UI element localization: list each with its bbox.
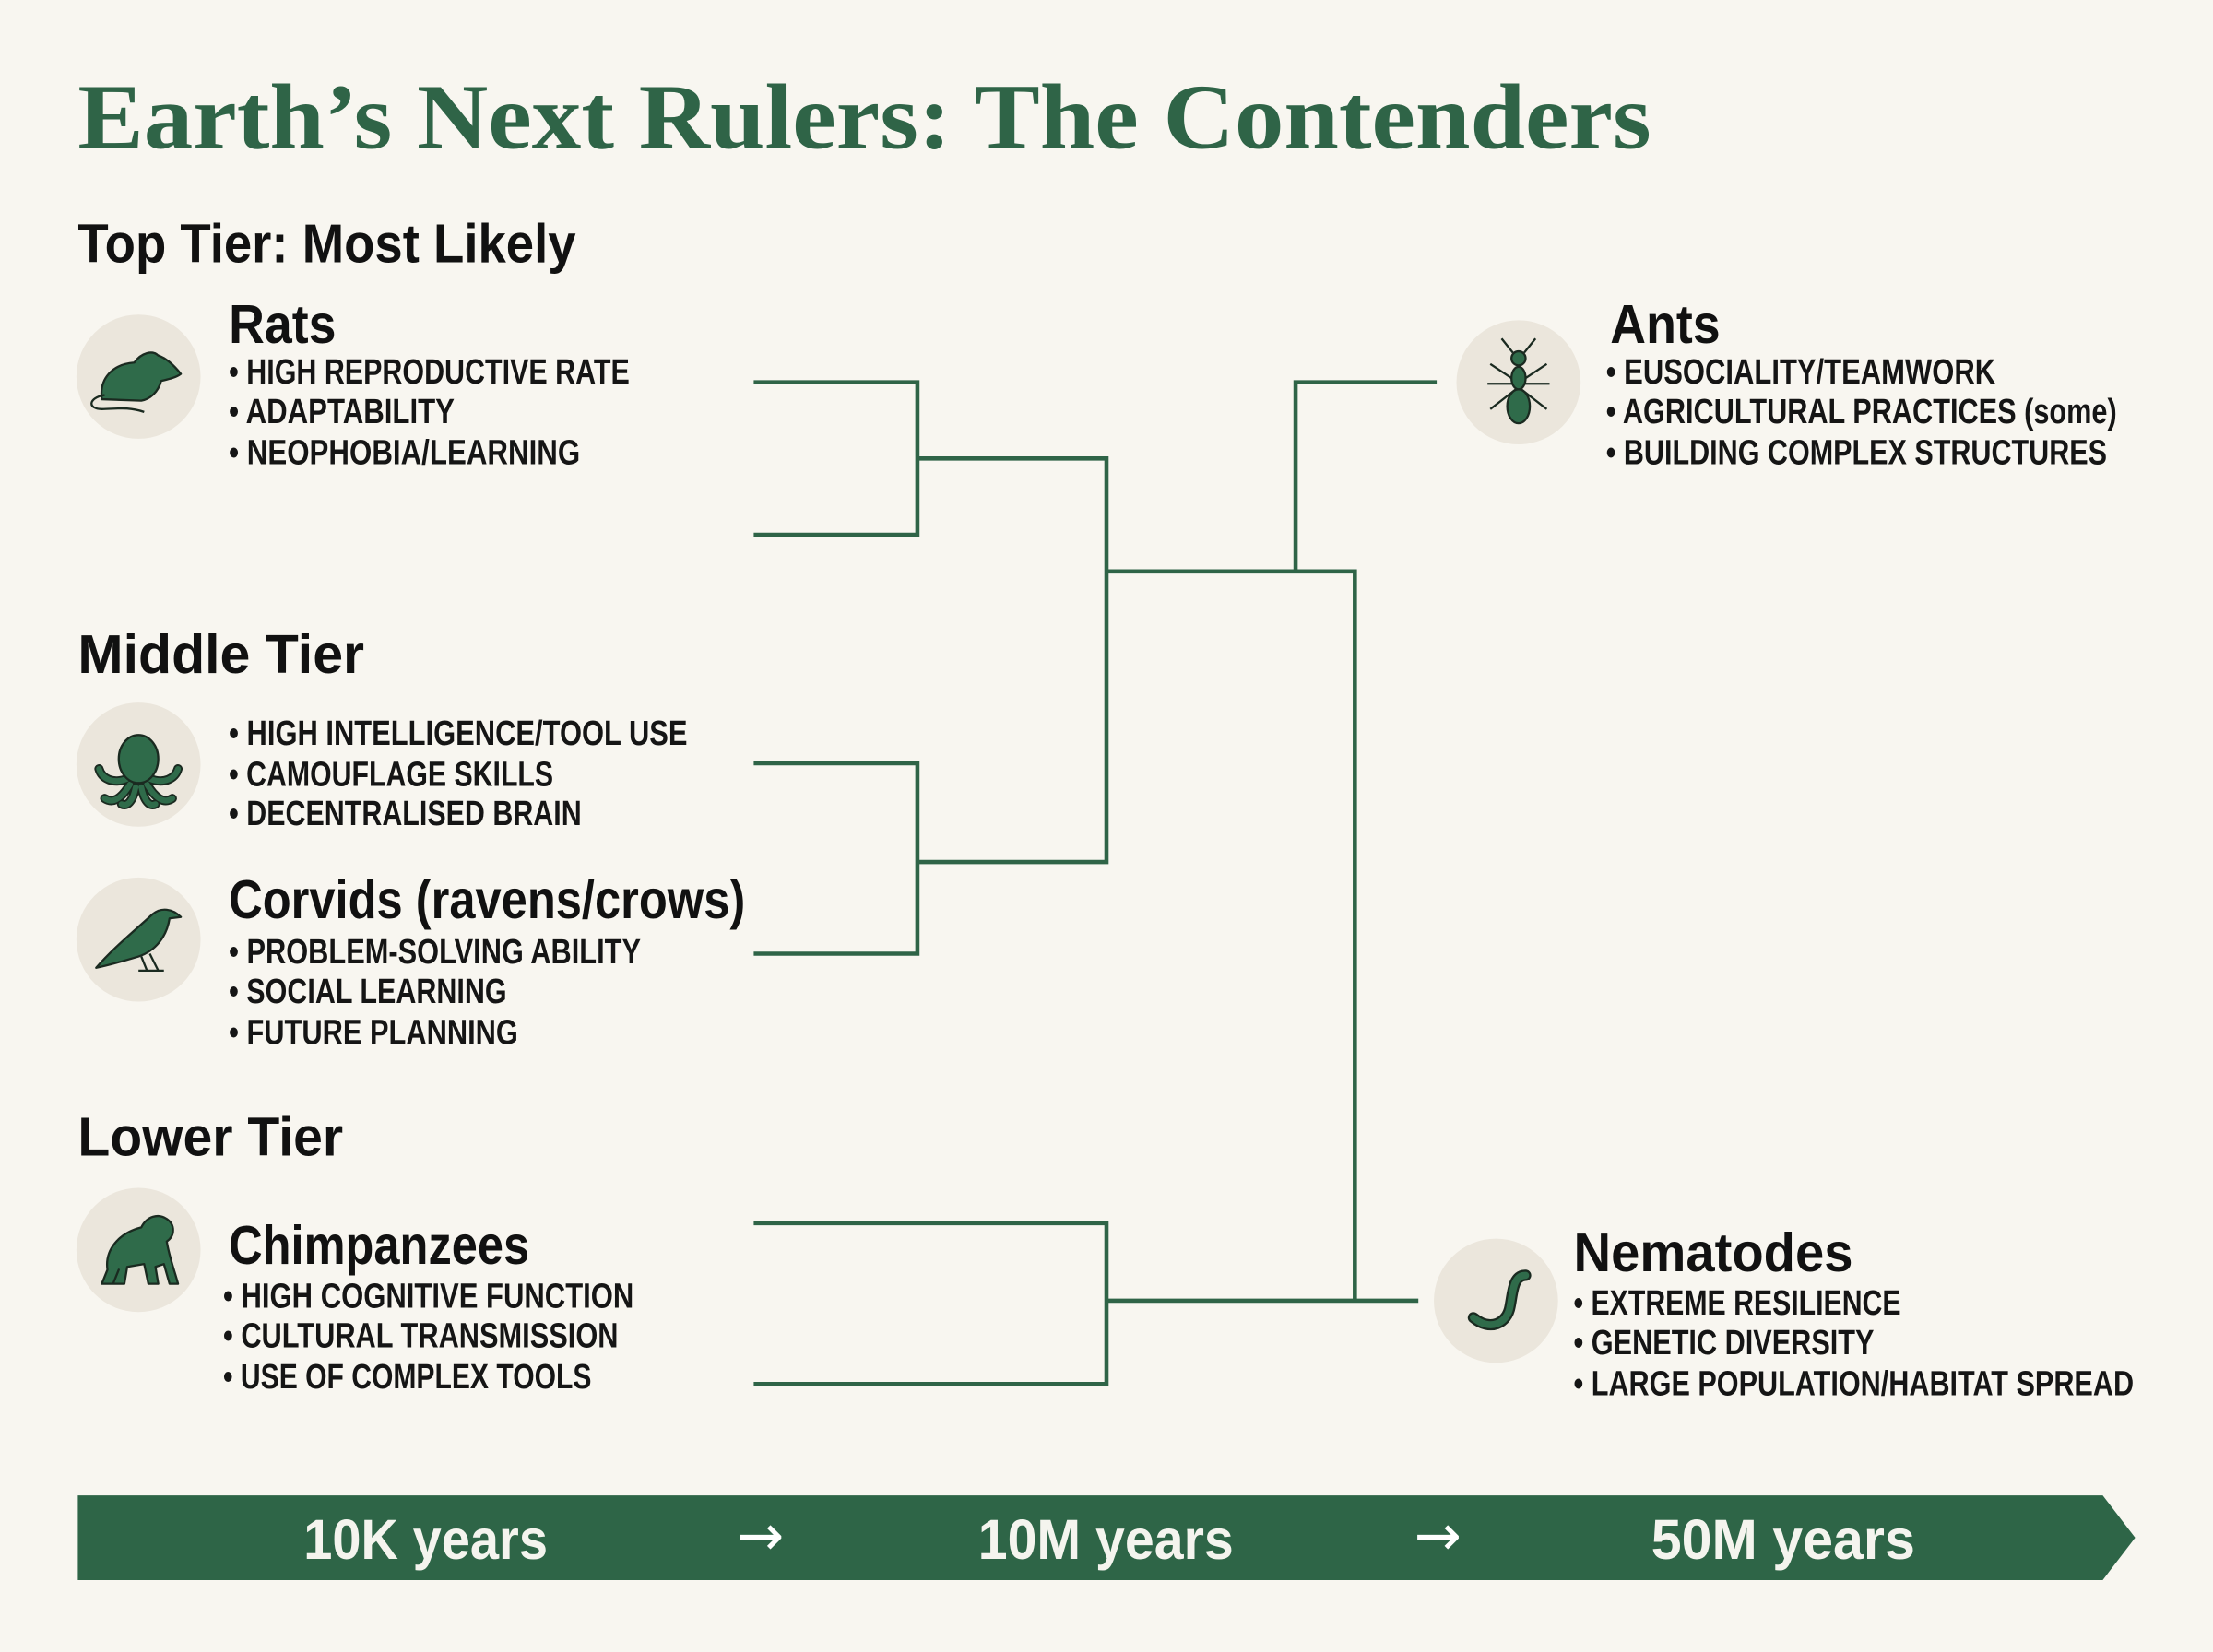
text: corvids: • SOCIAL LEARNING	[229, 972, 507, 1011]
panel: ants	[1457, 293, 2117, 472]
icon: rat	[77, 314, 201, 439]
text: octopus: • HIGH INTELLIGENCE/TOOL USE	[229, 714, 687, 753]
text: rats: • ADAPTABILITY	[229, 392, 455, 431]
text: octopus: • DECENTRALISED BRAIN	[229, 794, 582, 833]
icon: crow	[77, 878, 201, 1002]
text: nematodes: Nematodes	[1574, 1221, 1853, 1283]
heading: top tier: Top Tier: Most Likely	[77, 213, 576, 275]
timeline arrow: 10M years	[978, 1508, 1234, 1571]
text: rats	[229, 293, 630, 472]
panel: nematodes	[1434, 1221, 2134, 1403]
text: nematodes: • EXTREME RESILIENCE	[1574, 1283, 1901, 1323]
title: Earth’s Next Rulers: The Contenders	[77, 65, 1651, 169]
text: chimpanzees	[223, 1214, 633, 1397]
timeline arrow: 50M years	[1651, 1508, 1915, 1571]
text: nematodes	[1574, 1221, 2134, 1403]
icon: octopus	[77, 702, 201, 827]
timeline arrow: 10K years	[303, 1508, 548, 1571]
icon: ant	[1457, 320, 1580, 444]
text: chimpanzees: • USE OF COMPLEX TOOLS	[223, 1357, 591, 1397]
timeline arrow	[77, 1495, 2136, 1580]
panel: corvids	[77, 868, 745, 1052]
panel: rats	[77, 293, 630, 472]
timeline arrow: →	[737, 1503, 784, 1568]
text: ants: Ants	[1610, 293, 1721, 355]
text: ants: • EUSOCIALITY/TEAMWORK	[1606, 352, 1995, 392]
text: octopus	[229, 714, 687, 833]
icon: nematode	[1434, 1239, 1558, 1363]
panel: octopus	[77, 702, 687, 833]
panel: chimpanzees	[77, 1188, 633, 1397]
text: corvids: • PROBLEM-SOLVING ABILITY	[229, 932, 641, 972]
bracket lines	[753, 383, 1437, 1384]
text: chimpanzees: • CULTURAL TRANSMISSION	[223, 1316, 619, 1355]
heading: middle tier: Middle Tier	[77, 623, 364, 685]
text: chimpanzees: Chimpanzees	[229, 1214, 529, 1276]
icon: chimp	[77, 1188, 201, 1312]
text: chimpanzees: • HIGH COGNITIVE FUNCTION	[223, 1277, 633, 1316]
text: corvids: • FUTURE PLANNING	[229, 1012, 518, 1052]
text: rats: • NEOPHOBIA/LEARNING	[229, 432, 580, 472]
text: nematodes: • GENETIC DIVERSITY	[1574, 1323, 1874, 1363]
text: rats: • HIGH REPRODUCTIVE RATE	[229, 352, 630, 392]
text: corvids: Corvids (ravens/crows)	[229, 868, 745, 930]
heading: lower tier: Lower Tier	[77, 1105, 343, 1167]
text: octopus: • CAMOUFLAGE SKILLS	[229, 754, 553, 794]
text: ants	[1606, 293, 2117, 472]
text: corvids	[229, 868, 745, 1052]
timeline arrow: →	[1414, 1503, 1462, 1568]
text: rats: Rats	[229, 293, 336, 355]
